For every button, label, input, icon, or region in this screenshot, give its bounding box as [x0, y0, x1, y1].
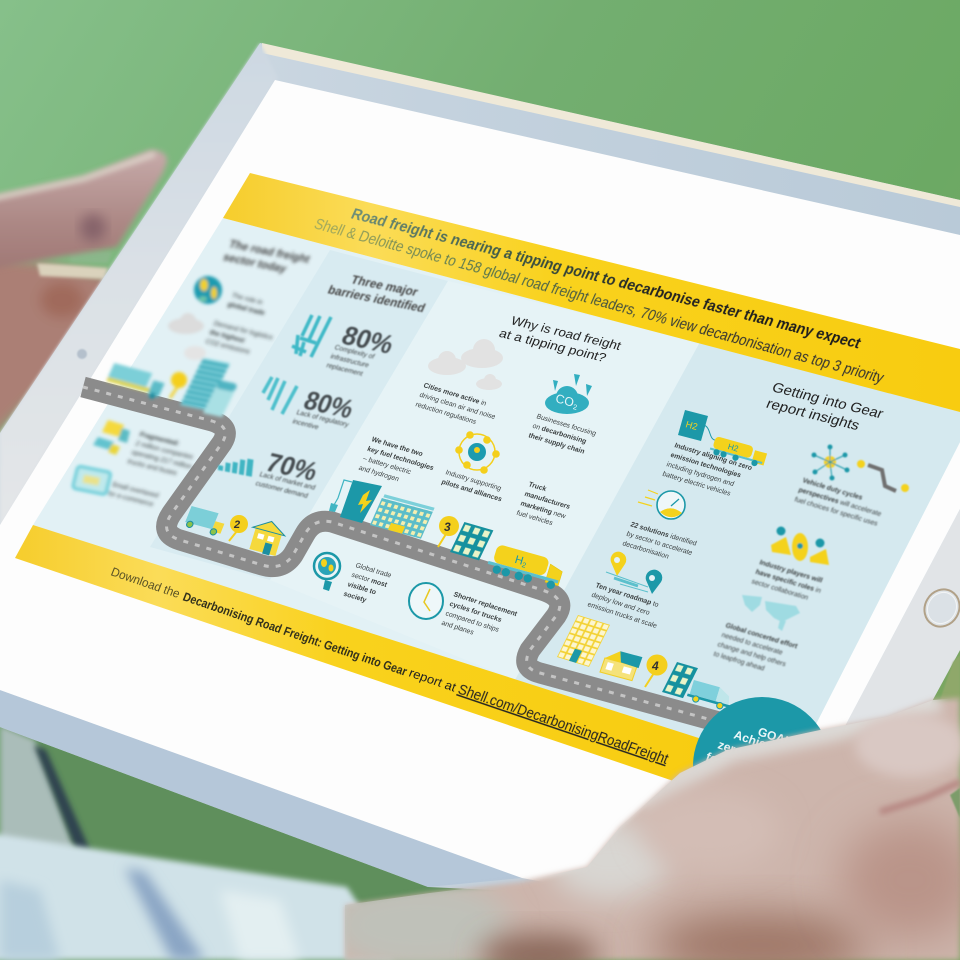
text: small overtaxed: Small overtaxed — [110, 481, 160, 500]
footer text: download the report: report at — [407, 666, 459, 695]
icon: yellow house — [246, 517, 288, 558]
text: global trade sector: sector most — [350, 572, 388, 589]
icon: electric van — [686, 679, 734, 711]
text: truck manufacturers: manufacturers — [523, 491, 571, 511]
green corner beyond tablet edge — [940, 655, 960, 700]
header title: Road freight is nearing a tipping point to decarbonise faster than many expect — [348, 206, 863, 352]
text: complexity of infrastructure: Complexity of — [333, 344, 376, 361]
panel: blurred insights right — [712, 444, 909, 679]
text: industry aligning: emission technologies — [669, 452, 742, 479]
text: we have two fuel technologies: We have the two — [370, 436, 424, 458]
heading: sector today: sector today — [221, 252, 289, 275]
text: industry supporting pilots: pilots and alliances — [440, 479, 503, 503]
icon: speedometer — [638, 490, 685, 519]
icon: map pin 4 — [645, 654, 668, 687]
text: role in global trade: The role in — [230, 292, 264, 307]
heading: three major barriers: barriers identified — [326, 283, 428, 315]
footer band — [15, 525, 730, 790]
text: global concerted effort: change and help others — [716, 641, 787, 668]
panel: why is road freight at a tipping point — [314, 312, 624, 647]
footer text: download the report: Download the — [109, 565, 182, 601]
icon: A to B route — [857, 460, 909, 492]
icon: hydrogen truck: H — [513, 554, 525, 568]
text: shorter replacement cycles: and planes — [440, 620, 475, 637]
icon: regulatory stripes — [263, 377, 297, 414]
stat: 80% infrastructure: 80% — [338, 320, 398, 359]
text: global trade sector: society — [342, 591, 368, 604]
green gap and ring between fingers — [37, 250, 112, 279]
text: complexity of infrastructure: replacement — [325, 362, 364, 378]
header subtitle: Shell & Deloitte spoke to 158 global road freight leaders, 70% view decarbonisation as top 3 priority — [311, 216, 887, 387]
shirt sleeve — [0, 833, 395, 960]
text: industry supporting pilots: Industry supporting — [444, 469, 502, 492]
text: industry aligning: battery electric vehicles — [661, 471, 732, 498]
green gap by thumb — [950, 788, 960, 818]
icon: screen — [72, 466, 111, 495]
text: logistics demand: CO2 emissions — [204, 338, 252, 356]
heading: getting into gear: report insights — [764, 396, 862, 433]
icon: truck 1 — [104, 363, 167, 400]
goal circle: zero emissions — [716, 738, 804, 778]
text: vehicle duty cycles: perspectives will accelerate — [797, 487, 882, 518]
icon: map pin 2: 2 — [233, 519, 240, 531]
left hand top finger over tablet — [0, 150, 167, 270]
text: truck manufacturers: Truck — [527, 481, 547, 493]
icon: map pin 3: 3 — [444, 520, 451, 534]
panel: getting into gear report insights — [557, 380, 886, 711]
heading: why is road freight: at a tipping point? — [497, 326, 609, 365]
text: global concerted effort: needed to accelerate — [720, 632, 784, 657]
heading: sector today: The road freight — [227, 239, 312, 266]
icon: two trucks — [93, 420, 130, 455]
text: industry players: Industry players will — [758, 559, 823, 585]
icon: small house — [600, 648, 642, 681]
heading: three major barriers: Three major — [349, 273, 421, 299]
panel: road freight sector today — [72, 239, 312, 509]
text: we have two fuel technologies: – battery electric — [362, 455, 413, 476]
icon: small tower — [203, 380, 238, 417]
text: lack of regulatory incentive: incentive — [291, 418, 320, 431]
icon: sun network — [812, 444, 850, 480]
road — [83, 387, 730, 725]
icon: tall tower — [180, 358, 230, 410]
right hand holding tablet — [330, 698, 960, 960]
text: global trade sector: Global trade — [354, 562, 392, 580]
text: cities more active: driving clean air and noise — [418, 392, 497, 421]
icon: teal building — [450, 522, 493, 560]
text: we have two fuel technologies: key fuel technologies — [366, 446, 435, 472]
icon: infrastructure pipes — [292, 315, 331, 357]
text: 22 solutions: by sector to accelerate — [625, 531, 693, 557]
icon: EV charger — [329, 480, 382, 523]
icon: small cloud — [184, 346, 206, 360]
text: lack of market demand: customer demand — [254, 480, 309, 500]
text: industry players: sector collaboration — [750, 578, 809, 602]
icon: pollution clouds — [428, 339, 503, 390]
icon: globe — [194, 276, 222, 304]
text: businesses focusing: their supply chain — [527, 432, 586, 456]
goal circle — [693, 697, 831, 835]
goal circle: for road freight — [704, 750, 791, 790]
goal circle: Achieving — [732, 728, 792, 759]
text: logistics demand: Demand for logistics — [212, 320, 274, 342]
text: global concerted effort: to leapfrog ahead — [712, 651, 766, 673]
text: fragmented: Fragmented: — [138, 431, 180, 448]
text: global trade sector: visible to — [346, 581, 377, 596]
icon: hydrogen pump and truck: H2 — [727, 441, 740, 454]
text: businesses focusing: Businesses focusing — [535, 413, 597, 438]
text: shorter replacement cycles: Shorter replacement — [452, 591, 519, 618]
icon: yellow office — [557, 615, 610, 667]
text: shorter replacement cycles: cycles for trucks — [448, 601, 503, 624]
text: truck manufacturers: fuel vehicles — [515, 510, 554, 527]
icon: world map — [742, 595, 800, 631]
text: ten year roadmap: deploy low and zero — [590, 592, 651, 617]
footer text: download the report: Decarbonising Road Freight: Getting into Gear — [181, 590, 409, 679]
icon: map pin 1 — [170, 372, 187, 398]
lower background: dark foliage and grey post — [0, 700, 520, 960]
icon: hydrogen truck — [486, 543, 565, 591]
text: industry players: have specific roles in — [754, 569, 822, 595]
text: vehicle duty cycles: fuel choices for specific uses — [793, 496, 879, 528]
icon: bar chart — [218, 453, 254, 477]
stat: 70%: 70% — [262, 447, 322, 486]
front camera — [77, 349, 87, 359]
text: ten year roadmap: emission trucks at scale — [586, 601, 658, 630]
icon: network — [455, 431, 500, 474]
footer text: download the report: Shell.com/DecarbonisingRoadFreight — [456, 682, 670, 768]
text: we have two fuel technologies: and hydrogen — [357, 465, 400, 483]
heading: why is road freight: Why is road freight — [509, 314, 624, 353]
text: fragmented: operating 217 million — [130, 449, 193, 471]
text: fragmented: trucks and buses — [126, 458, 179, 477]
icon: map pin 3 — [438, 516, 459, 547]
icon: hydrogen pump and truck: H2 — [684, 419, 699, 432]
text: fragmented: 2 million companies — [134, 440, 195, 461]
lower-left road scenery: truck, pin 2, house — [183, 506, 288, 558]
text: shorter replacement cycles: compared to ships — [444, 610, 500, 634]
icon: roadmap pins — [606, 552, 662, 594]
panel: three major barriers — [218, 269, 434, 501]
text: role in global trade: global trade — [226, 301, 266, 317]
home button — [918, 583, 960, 633]
text: 22 solutions: decarbonisation — [621, 540, 670, 561]
text: cities more active: Cities more active in — [422, 382, 487, 408]
header band — [223, 173, 960, 412]
text: industry aligning: Industry aligning on zero — [673, 442, 753, 472]
text: businesses focusing: on decarbonising — [531, 423, 587, 445]
text: logistics demand: the highest — [208, 329, 246, 345]
icon: CO2 cloud: 2 — [572, 402, 578, 412]
icon: magnifier globe — [314, 553, 340, 591]
icon: office building — [370, 494, 435, 539]
infographic panel background with columns — [33, 218, 960, 775]
goal circle: GOAL — [756, 725, 794, 749]
text: vehicle duty cycles: Vehicle duty cycles — [801, 477, 864, 502]
text: small overtaxed: for e-commerce — [106, 490, 155, 508]
icon: truck 2 — [183, 506, 228, 537]
heading: getting into gear: Getting into Gear — [770, 380, 886, 421]
text: ten year roadmap: Ten year roadmap to — [594, 582, 660, 609]
icon: CO2 cloud — [545, 374, 592, 414]
text: cities more active: reduction regulations — [414, 401, 478, 426]
text: truck manufacturers: marketing new — [519, 500, 567, 520]
stat: 80% regulatory: 80% — [300, 385, 358, 424]
text: lack of market demand: Lack of market and — [258, 471, 316, 492]
text: complexity of infrastructure: infrastructure — [329, 353, 370, 369]
text: 22 solutions: 22 solutions identified — [629, 521, 698, 548]
icon: CO2 cloud: CO — [554, 391, 575, 410]
left hand palm behind tablet — [0, 255, 120, 450]
footer text: download the report — [109, 565, 670, 768]
icon: grey cloud — [168, 313, 204, 334]
text: industry aligning: including hydrogen and — [665, 461, 735, 488]
icon: clock — [409, 583, 443, 619]
text: lack of regulatory incentive: Lack of regulatory — [295, 409, 350, 429]
icon: people and star — [771, 526, 829, 565]
icon: teal block — [662, 662, 698, 698]
icon: map pin 4: 4 — [651, 659, 659, 673]
icon: hydrogen truck: 2 — [521, 560, 527, 570]
text: global concerted effort: Global concerted effort — [724, 622, 799, 650]
icon: hydrogen pump and truck — [678, 410, 768, 469]
